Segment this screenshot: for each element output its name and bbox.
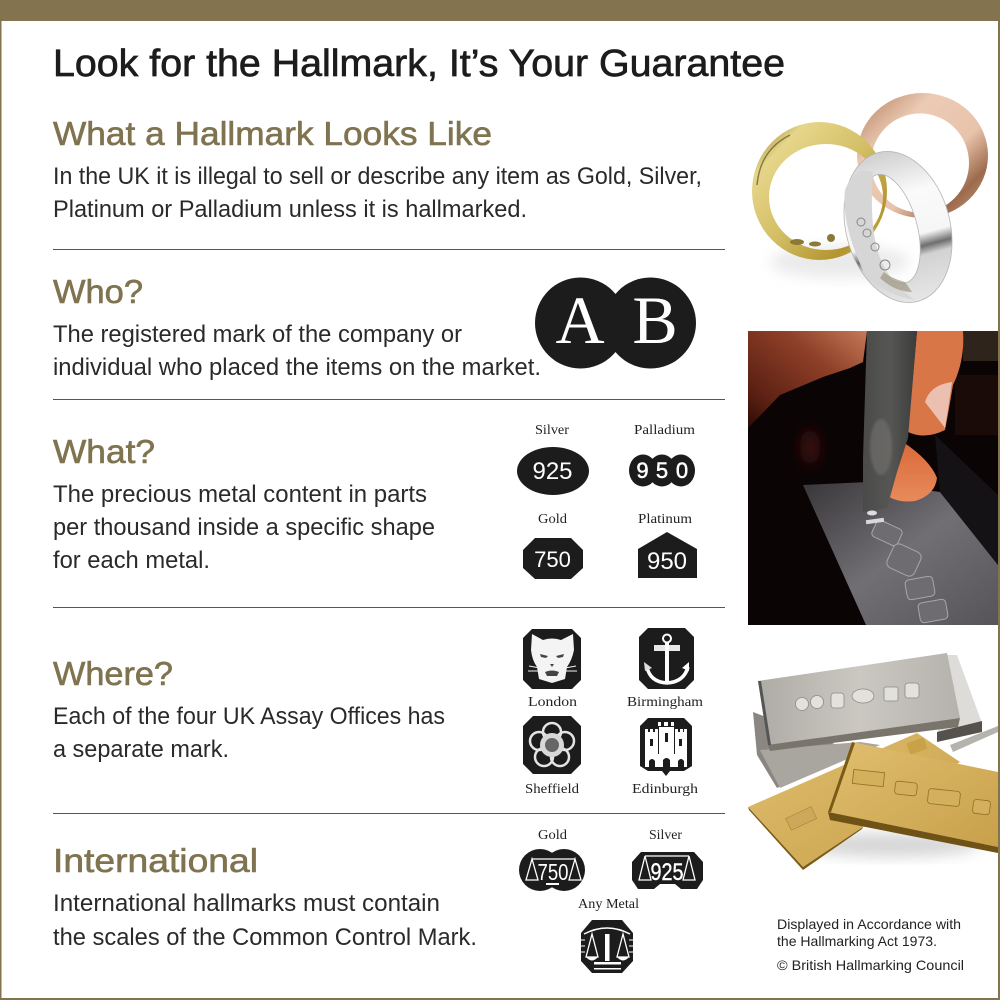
- icon: Edinburgh castle: Edinburgh: [632, 782, 698, 797]
- front gold bar: [828, 742, 998, 847]
- photo: hand stamping hallmarks: [748, 331, 1000, 625]
- heading: What a Hallmark Looks Like: [53, 115, 492, 152]
- icon: platinum 950: Platinum: [638, 512, 692, 527]
- thumb: [908, 331, 963, 436]
- icon: palladium 950: 0: [676, 458, 688, 483]
- back gold bar: [748, 733, 960, 867]
- hand: [748, 331, 867, 428]
- footnote: © British Hallmarking Council: [777, 957, 964, 973]
- icon: London leopard: [523, 629, 581, 710]
- icon: gold 750: Gold: [538, 512, 567, 527]
- heading: International: [53, 842, 258, 879]
- heading: Who?: [53, 273, 143, 310]
- icon: international silver: 925: [650, 859, 684, 886]
- icon: silver 925: 925: [532, 458, 573, 485]
- icon: Birmingham anchor: Birmingham: [627, 695, 703, 710]
- white ring inner surface: [844, 170, 915, 300]
- file tool: [863, 331, 917, 512]
- body text: International hallmarks must contain: [53, 890, 440, 917]
- icon: Birmingham anchor: [627, 628, 703, 710]
- yellow gold ring: [752, 122, 887, 260]
- photo: three wedding rings: [752, 93, 988, 315]
- body text: [53, 163, 702, 223]
- body text: Platinum or Palladium unless it is hallmarked.: [53, 196, 527, 223]
- icon: palladium 950: [629, 423, 695, 486]
- body text: Each of the four UK Assay Offices has: [53, 703, 445, 730]
- body text: per thousand inside a specific shape: [53, 514, 435, 541]
- rose gold ring: [857, 93, 988, 218]
- icon: London leopard: London: [528, 695, 577, 710]
- bar with marks: [803, 482, 998, 625]
- icon: platinum 950: 950: [647, 548, 687, 575]
- icon: Sheffield rose: [523, 716, 581, 797]
- shadow: [800, 833, 980, 857]
- heading: Where?: [53, 655, 173, 692]
- body text: individual who placed the items on the market.: [53, 354, 541, 381]
- lower finger: [889, 442, 937, 502]
- body text: the scales of the Common Control Mark.: [53, 924, 477, 951]
- icon: any metal: [578, 897, 639, 973]
- body text: [53, 890, 477, 951]
- icon: international gold: 750: [538, 859, 568, 885]
- body text: a separate mark.: [53, 736, 229, 763]
- title: Look for the Hallmark, It’s Your Guarantee: [53, 43, 785, 85]
- icon: Sheffield rose: Sheffield: [525, 782, 579, 797]
- icon: gold 750: 750: [534, 547, 571, 572]
- icon: AB sponsor mark: B: [632, 282, 678, 358]
- body text: The registered mark of the company or: [53, 321, 462, 348]
- icon: AB sponsor mark: [535, 278, 696, 368]
- icon: international silver: [632, 828, 703, 889]
- section: what a hallmark looks like: [53, 115, 702, 223]
- icon: platinum 950: [638, 512, 697, 578]
- section: international: [53, 828, 703, 973]
- icon: silver 925: Silver: [535, 423, 569, 438]
- top silver bar: [758, 653, 960, 745]
- footnote: Displayed in Accordance with: [777, 916, 961, 932]
- footnote: the Hallmarking Act 1973.: [777, 933, 937, 949]
- body text: [53, 321, 541, 381]
- section: who: [53, 273, 696, 381]
- icon: palladium 950: Palladium: [634, 423, 695, 438]
- footnote: [777, 916, 964, 973]
- section: where: [53, 628, 703, 797]
- body text: The precious metal content in parts: [53, 481, 427, 508]
- icon: palladium 950: 9: [636, 458, 649, 483]
- icon: international gold: Gold: [538, 828, 567, 843]
- icon: palladium 950: 5: [656, 458, 668, 483]
- icon: silver 925: [517, 423, 589, 495]
- body text: In the UK it is illegal to sell or describe any item as Gold, Silver,: [53, 163, 702, 190]
- section: what: [53, 423, 697, 579]
- icon: gold 750: [523, 512, 583, 579]
- body text: [53, 481, 435, 574]
- icon: AB sponsor mark: A: [555, 282, 605, 358]
- body text: [53, 703, 445, 763]
- icon: any metal: Any Metal: [578, 897, 639, 912]
- icon: international silver: Silver: [649, 828, 682, 843]
- heading: What?: [53, 433, 155, 470]
- body text: for each metal.: [53, 547, 210, 574]
- icon: Edinburgh castle: [632, 718, 698, 797]
- back silver bars: [938, 655, 982, 732]
- photo: silver and gold bars: [748, 653, 998, 870]
- white gold ring: [828, 139, 968, 315]
- icon: international gold: [519, 828, 585, 891]
